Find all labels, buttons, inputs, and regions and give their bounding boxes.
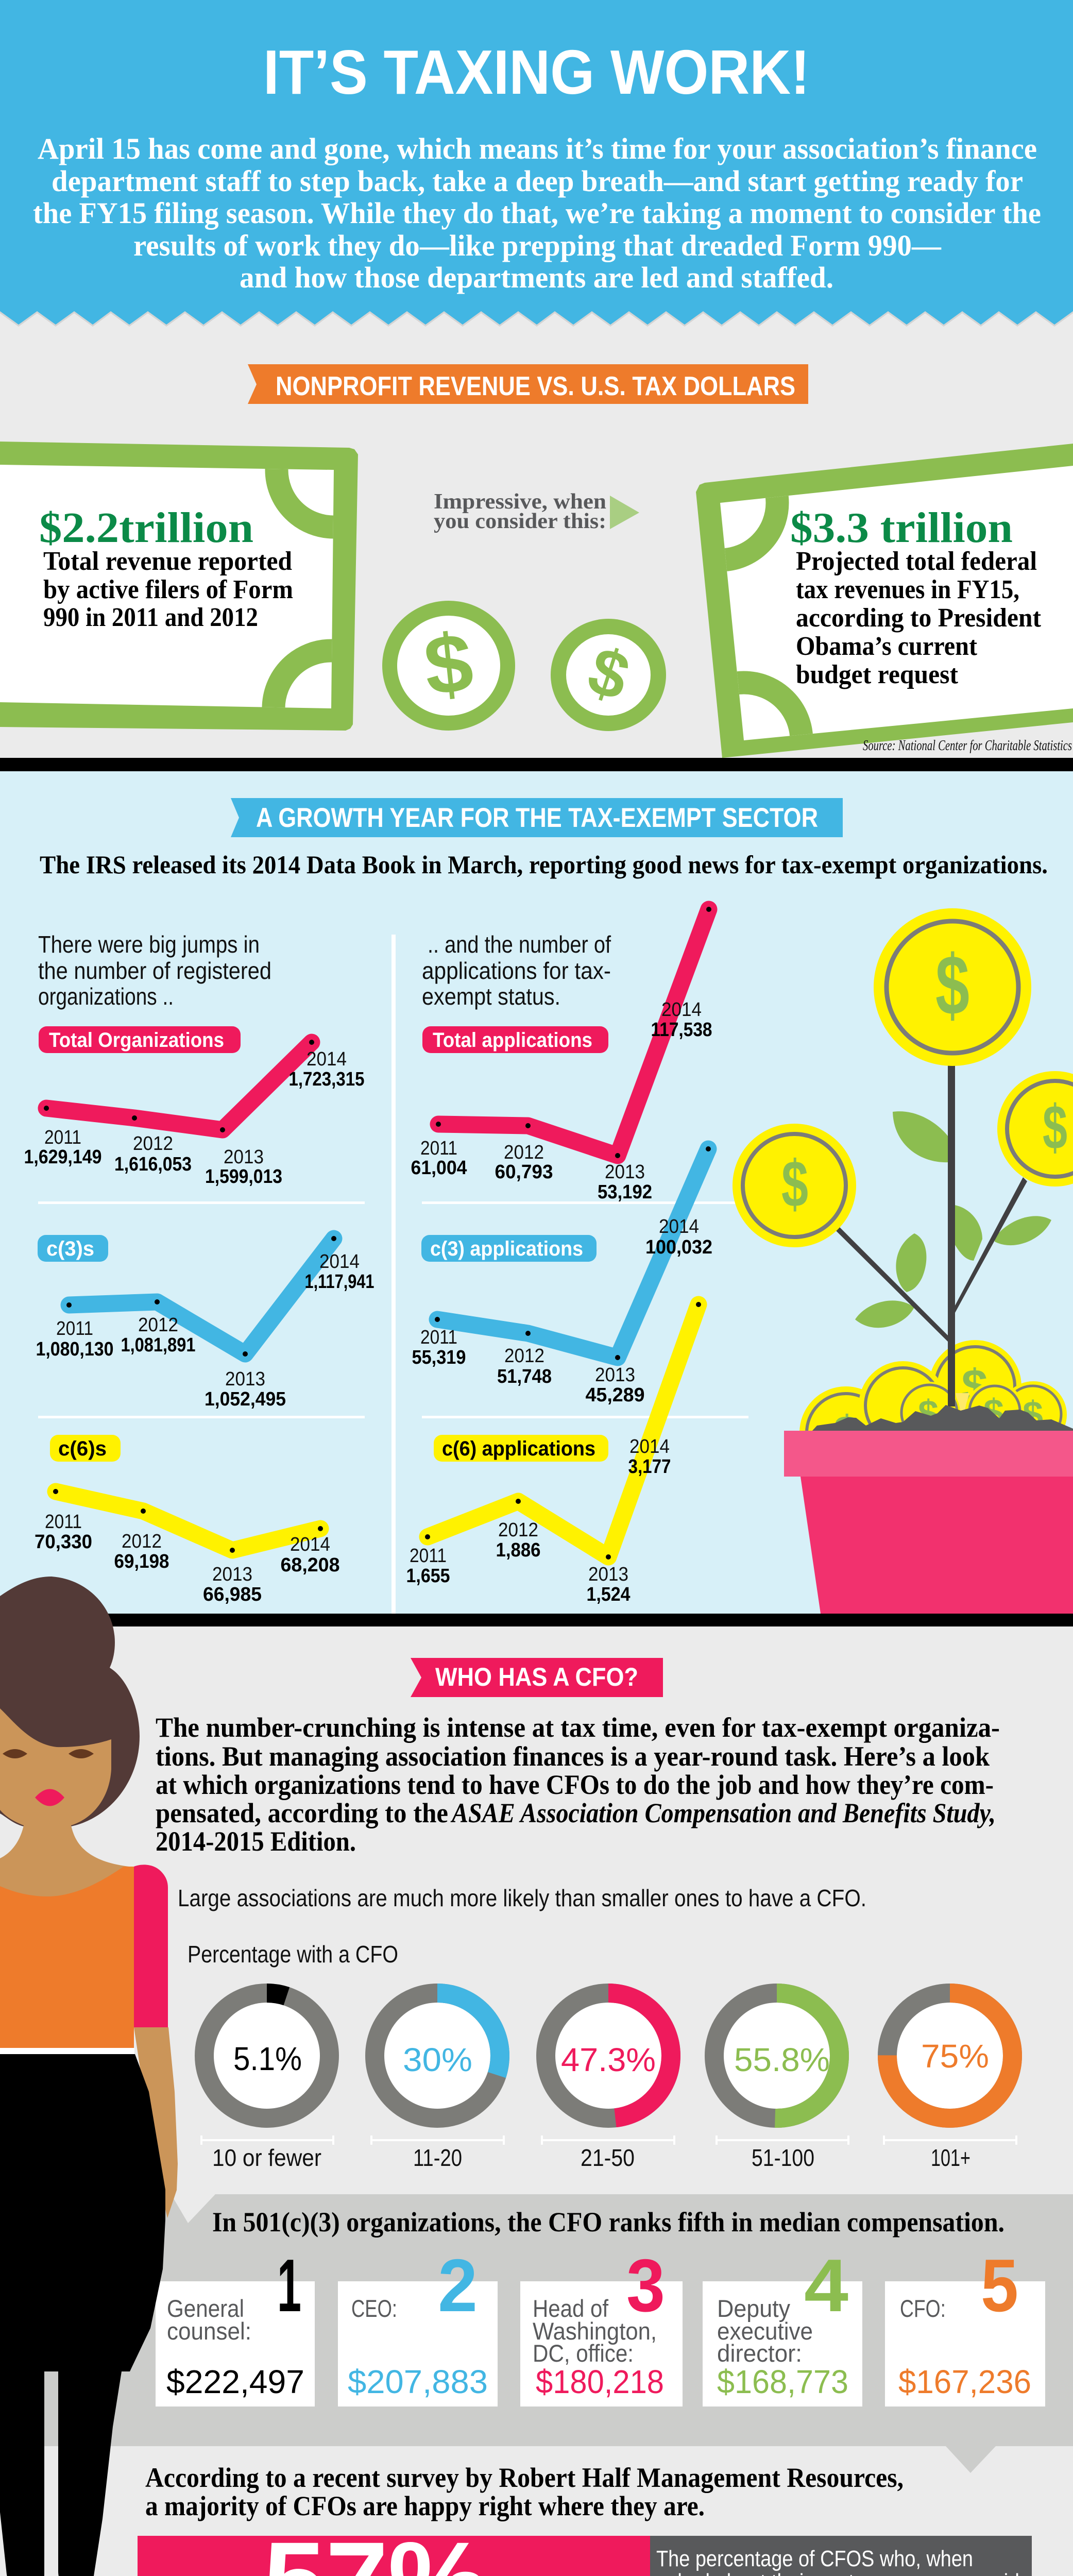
chart: c(3) applications: c(3) applications (430, 1238, 583, 1260)
intro text: department staff to step back, take a deep breath—and start getting ready for (52, 164, 1023, 198)
chart: c(3) applications: 2011 (420, 1327, 457, 1348)
shirt (0, 1867, 134, 2048)
donut: 11-20: 30% (403, 2041, 472, 2078)
chart: c(6)s: 69,198 (114, 1551, 169, 1572)
skin (0, 1708, 134, 1906)
left dollar bill (0, 442, 358, 731)
chart: c(6)s: 2014 (290, 1534, 330, 1555)
banner: nonprofit revenue: NONPROFIT REVENUE VS. U.S. TAX DOLLARS (276, 371, 795, 401)
rank card 5: CFO: (900, 2295, 946, 2322)
comparison text with arrow (434, 490, 639, 533)
donut: 11-20: 11-20 (413, 2144, 462, 2171)
top coin (874, 908, 1031, 1066)
right intro text (422, 931, 611, 1010)
chart: c(6)s: 2011 (45, 1511, 82, 1533)
donut: 10 or fewer (201, 1993, 333, 2171)
left intro text: organizations .. (38, 983, 174, 1010)
chart: c(3) applications: 2012 (504, 1345, 544, 1367)
title: IT’S TAXING WORK! (263, 37, 810, 107)
left dollar bill: $2.2trillion (39, 504, 253, 552)
sleeve (134, 1865, 168, 2027)
donut: 101+: 75% (921, 2038, 989, 2075)
chart: total organizations: 1,616,053 (114, 1154, 192, 1175)
intro text: and how those departments are led and staffed. (240, 261, 833, 294)
survey text: According to a recent survey by Robert Half Management Resources, (145, 2462, 904, 2493)
chart: total applications: 2013 (605, 1161, 645, 1183)
rank card 4: 4 (804, 2244, 848, 2327)
rank card 4: Deputy (717, 2295, 790, 2322)
right coin (997, 1071, 1073, 1187)
illustration: money plant (733, 908, 1073, 1614)
donut: 101+: 101+ (931, 2144, 970, 2171)
intro paragraph: at which organizations tend to have CFOs to do the job and how they’re com- (156, 1769, 994, 1800)
rank card 3: $180,218 (536, 2363, 664, 2400)
chart: total applications: 2012 (504, 1142, 544, 1163)
rank card 3: Washington, (533, 2317, 657, 2345)
chart: c(6) applications: 1,655 (406, 1565, 450, 1587)
flower pot (784, 1431, 1073, 1614)
panel: growth year (0, 771, 1073, 1614)
chart: total organizations: 2014 (306, 1048, 347, 1070)
rank card 5: 5 (981, 2244, 1018, 2327)
right intro text: exempt status. (422, 983, 560, 1010)
survey text (145, 2462, 904, 2521)
left dollar bill: by active filers of Form (43, 575, 293, 604)
chart: c(6) applications: 2014 (629, 1436, 670, 1458)
chart: total organizations: 1,723,315 (288, 1069, 365, 1090)
rank card 2: $207,883 (348, 2363, 488, 2400)
right dollar bill: budget request (796, 660, 959, 689)
chart: total applications: Total applications (433, 1029, 592, 1052)
rank card 1: General (167, 2295, 244, 2322)
donut: 21-50: 21-50 (581, 2144, 635, 2171)
eyes (3, 1749, 94, 1758)
chart: total organizations (24, 1026, 365, 1188)
donut lead-in text: Large associations are much more likely than smaller ones to have a CFO. (178, 1885, 866, 1911)
shoes (6, 2567, 98, 2576)
banner: who has a CFO (411, 1658, 663, 1697)
donut: 10 or fewer: 5.1% (233, 2040, 302, 2077)
chart: c(6) applications: 2013 (588, 1564, 628, 1585)
chart: c(6)s (35, 1435, 340, 1605)
chart: total applications: 61,004 (411, 1157, 467, 1179)
chart: total applications: 2014 (661, 999, 702, 1021)
chart: c(3)s: 2011 (56, 1318, 93, 1340)
donut chart heading: Percentage with a CFO (188, 1941, 398, 1968)
stat bar: 57% (138, 2519, 1032, 2576)
comparison text with arrow: you consider this: (434, 510, 606, 533)
panel: nonprofit revenue vs tax dollars (0, 364, 1073, 798)
coin pile: $ (1023, 1394, 1043, 1435)
icon: dollar coin large (382, 601, 515, 731)
coin pile: $ (918, 1393, 939, 1434)
chart: total applications: 2011 (420, 1138, 457, 1159)
right dollar bill: $3.3 trillion (790, 504, 1013, 552)
donut: 51-100: 55.8% (734, 2041, 830, 2078)
rank card 2 (338, 2244, 498, 2406)
chart: c(6)s: 2012 (122, 1531, 162, 1552)
chart: c(6)s: 70,330 (35, 1531, 92, 1553)
right intro text: .. and the number of (428, 931, 611, 958)
rank card 3: Head of (533, 2295, 609, 2322)
arm (134, 2027, 178, 2218)
chart: c(3)s: c(3)s (46, 1238, 94, 1260)
compensation heading: In 501(c)(3) organizations, the CFO ranks fifth in median compensation. (212, 2207, 1004, 2238)
chart: c(3) applications: 51,748 (497, 1366, 552, 1387)
intro paragraph (156, 1712, 1000, 1857)
chart: c(6)s: 66,985 (203, 1584, 262, 1605)
donut: 21-50: 47.3% (561, 2041, 656, 2078)
donut: 101+ (884, 1993, 1016, 2171)
panel: header (0, 0, 1073, 327)
left intro text: There were big jumps in (38, 931, 260, 958)
chart: c(3)s (36, 1235, 374, 1410)
rank card 1: $222,497 (166, 2363, 304, 2400)
chart: c(6) applications (406, 1302, 701, 1605)
right dollar bill: Projected total federal (796, 547, 1037, 576)
chart: total organizations: 2013 (224, 1146, 264, 1168)
left intro text (38, 931, 271, 1010)
hair (0, 1577, 140, 1826)
chart: c(3)s: 1,080,130 (36, 1338, 113, 1360)
coin pile: $ (833, 1406, 860, 1459)
rank card 4 (703, 2244, 862, 2406)
chart: total applications: 53,192 (598, 1181, 652, 1203)
soil (812, 1405, 1073, 1431)
chart: c(3) applications: 100,032 (645, 1236, 712, 1258)
chart: total organizations: 2011 (44, 1127, 81, 1148)
left coin (733, 1124, 856, 1247)
chart: c(3)s: 1,052,495 (205, 1388, 286, 1410)
donut: 11-20 (371, 1993, 504, 2171)
chart: c(6) applications: 2011 (410, 1545, 447, 1567)
chart: c(6) applications: 3,177 (628, 1456, 671, 1478)
chart: c(6)s: 2013 (212, 1564, 252, 1585)
panel: median compensation callout (0, 2194, 1073, 2473)
rank card 2: CEO: (351, 2295, 397, 2322)
chart: total organizations: 1,599,013 (205, 1166, 282, 1188)
donut: 51-100: 51-100 (752, 2144, 814, 2171)
left coin: $ (781, 1147, 808, 1221)
chart: c(6) applications: c(6) applications (442, 1437, 595, 1460)
chart: c(3)s: 1,081,891 (121, 1334, 196, 1356)
banner: nonprofit revenue (248, 364, 808, 404)
chart: total organizations: Total Organizations (49, 1029, 224, 1052)
rank card 4: $168,773 (717, 2363, 848, 2400)
right dollar bill: according to President (796, 603, 1042, 633)
rank card 3: DC, office: (533, 2340, 634, 2367)
coin pile: $ (983, 1392, 1004, 1433)
intro paragraph: pensated, according to the (156, 1798, 448, 1828)
rank card 5: $167,236 (898, 2363, 1031, 2400)
chart: c(3) applications: 2014 (659, 1216, 699, 1238)
chart: c(3)s: 2013 (225, 1368, 265, 1390)
right dollar bill: tax revenues in FY15, (796, 575, 1019, 604)
left dollar bill: 990 in 2011 and 2012 (43, 603, 258, 632)
chart: c(3) applications: 45,289 (585, 1384, 645, 1406)
left dollar bill: Total revenue reported (43, 547, 292, 576)
chart: total organizations: 2012 (133, 1133, 173, 1155)
chart: total organizations: 1,629,149 (24, 1146, 102, 1168)
right intro text: applications for tax- (422, 957, 611, 984)
chart: c(3)s: 2014 (319, 1251, 360, 1273)
banner: who has a CFO: WHO HAS A CFO? (435, 1663, 638, 1691)
stat bar: 57%: The percentage of CFOS who, when (656, 2546, 973, 2571)
right dollar bill (696, 444, 1073, 758)
coin pile: $ (961, 1360, 988, 1413)
donut: 21-50 (542, 1993, 674, 2171)
illustration: woman (0, 1577, 178, 2576)
donut: 10 or fewer: 10 or fewer (212, 2144, 321, 2171)
icon: dollar coin small (551, 619, 666, 731)
chart: c(3)s: 1,117,941 (305, 1271, 374, 1293)
intro paragraph: 2014-2015 Edition. (156, 1826, 356, 1857)
intro text (33, 132, 1041, 294)
trousers (0, 2054, 165, 2576)
chart: c(6) applications: 2012 (498, 1519, 538, 1541)
left intro text: the number of registered (38, 957, 271, 984)
chart: c(6)s: 68,208 (280, 1554, 340, 1576)
intro text: the FY15 filing season. While they do that, we’re taking a moment to consider the (33, 196, 1041, 230)
leaves (855, 1111, 1051, 1328)
chart: c(6)s: c(6)s (58, 1437, 107, 1460)
intro text: April 15 has come and gone, which means it’s time for your association’s finance (38, 132, 1037, 165)
rank card 4: director: (717, 2340, 802, 2367)
panel: who has a CFO (0, 1577, 1073, 2576)
rank card 2: 2 (438, 2244, 478, 2327)
donut: 51-100 (714, 1993, 848, 2171)
chart: total applications: 117,538 (651, 1019, 712, 1041)
chart: c(6) applications: 1,524 (586, 1584, 631, 1605)
chart: total applications (411, 907, 712, 1203)
rank card 4: executive (717, 2317, 813, 2345)
survey text: a majority of CFOs are happy right where they are. (145, 2490, 705, 2521)
chart: c(3) applications (412, 1146, 712, 1406)
icon: dollar coin small: $ (580, 632, 638, 715)
belt (0, 2048, 134, 2054)
right dollar bill: Obama’s current (796, 632, 978, 661)
rank card 3: 3 (626, 2244, 665, 2327)
intro text: results of work they do—like prepping that dreaded Form 990— (133, 229, 942, 262)
intro paragraph: tions. But managing association finances is a year-round task. Here’s a look (156, 1741, 990, 1772)
banner: growth year (231, 798, 843, 837)
banner: growth year: A GROWTH YEAR FOR THE TAX-EXEMPT SECTOR (256, 803, 818, 833)
chart: c(3) applications: 2013 (595, 1364, 635, 1386)
rank card 5 (885, 2244, 1045, 2406)
top coin: $ (935, 938, 969, 1032)
intro paragraph: ASAE Association Compensation and Benefits Study, (450, 1798, 996, 1828)
comparison text with arrow: Impressive, when (434, 490, 606, 514)
chart: c(3)s: 2012 (138, 1314, 178, 1336)
rank card 1: 1 (277, 2244, 301, 2327)
chart: c(6) applications: 1,886 (496, 1539, 541, 1561)
stem and branches (836, 1061, 1027, 1406)
rank card 1: counsel: (167, 2317, 251, 2345)
chart: c(3) applications: 55,319 (412, 1347, 466, 1368)
icon: dollar coin large: $ (420, 616, 477, 713)
intro paragraph: The number-crunching is intense at tax time, even for tax-exempt organiza- (156, 1712, 1000, 1743)
mouth (35, 1789, 64, 1806)
chart: total applications: 60,793 (495, 1161, 553, 1183)
rank card 1 (156, 2244, 315, 2406)
rank card 3 (520, 2244, 683, 2406)
coin pile (799, 1340, 1067, 1479)
